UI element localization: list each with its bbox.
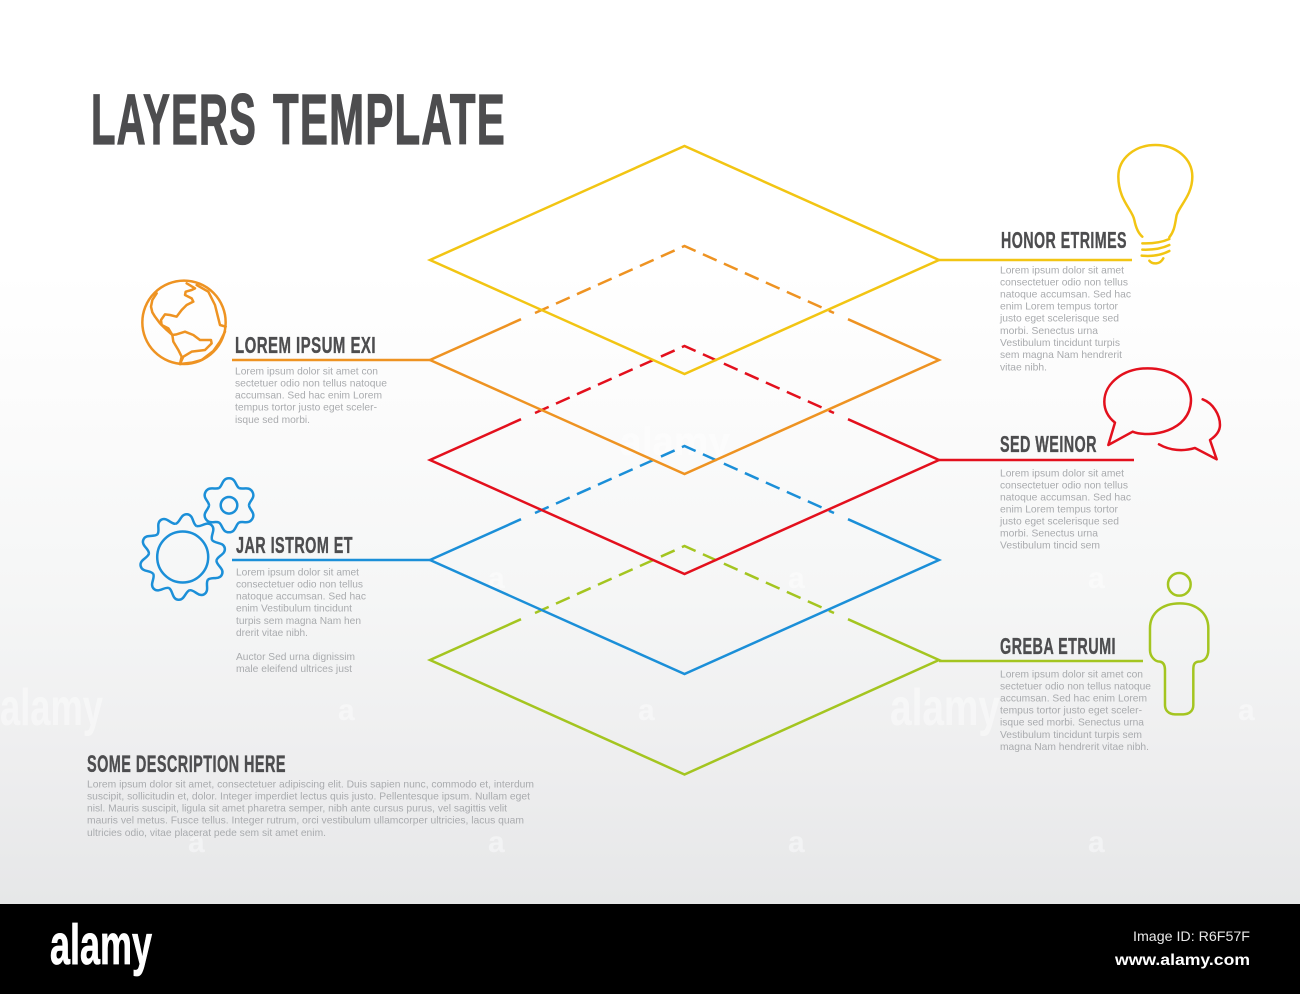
text: lorem ipsum exi body: tempus tortor justo eget sceler- bbox=[235, 402, 377, 414]
watermark: a bbox=[788, 562, 805, 595]
description block bbox=[87, 751, 534, 839]
text: jar istrom et body: male eleifend ultrices just bbox=[236, 663, 352, 675]
heading: some description here: SOME DESCRIPTION HERE bbox=[87, 751, 286, 778]
text: sed weinor body: enim Lorem tempus tortor bbox=[1000, 504, 1118, 516]
text: honor etrimes body: natoque accumsan. Sed hac bbox=[1000, 288, 1131, 300]
watermark: alamy bbox=[890, 679, 1000, 737]
watermark: a bbox=[1088, 826, 1105, 859]
watermark: a bbox=[338, 694, 355, 727]
footer image id: Image ID: R6F57F bbox=[1133, 928, 1250, 944]
icon: globe bbox=[142, 281, 226, 364]
icon: gears bbox=[134, 478, 257, 604]
text: honor etrimes body: vitae nibh. bbox=[1000, 362, 1047, 374]
icon: person bbox=[1150, 573, 1208, 714]
text: jar istrom et body: natoque accumsan. Sed hac bbox=[236, 590, 366, 602]
text: sed weinor body: Lorem ipsum dolor sit amet bbox=[1000, 468, 1124, 480]
text: description body bbox=[87, 778, 534, 839]
callout: sed weinor bbox=[939, 368, 1220, 552]
text: jar istrom et body: turpis sem magna Nam hen bbox=[236, 615, 361, 627]
callout: greba etrumi bbox=[939, 573, 1208, 753]
text: honor etrimes body: consectetuer odio non tellus bbox=[1000, 276, 1128, 288]
text: sed weinor body: morbi. Senectus urna bbox=[1000, 528, 1098, 540]
heading: honor etrimes: HONOR ETRIMES bbox=[1001, 227, 1127, 253]
text: jar istrom et body: consectetuer odio non tellus bbox=[236, 578, 363, 590]
watermark: a bbox=[638, 694, 655, 727]
text: lorem ipsum exi body: sectetuer odio non tellus natoque bbox=[235, 378, 387, 390]
text: sed weinor body: natoque accumsan. Sed hac bbox=[1000, 492, 1131, 504]
heading: sed weinor: SED WEINOR bbox=[1000, 431, 1097, 457]
text: honor etrimes body: Lorem ipsum dolor sit amet bbox=[1000, 264, 1124, 276]
watermark: alamy bbox=[0, 679, 103, 737]
text: description body: ultricies odio, vitae placerat pede sem sit amet enim. bbox=[87, 827, 326, 839]
text: greba etrumi body: sectetuer odio non tellus natoque bbox=[1000, 680, 1151, 692]
text: greba etrumi body: tempus tortor justo eget sceler- bbox=[1000, 704, 1142, 716]
connector: orange bbox=[232, 359, 431, 361]
text: lorem ipsum exi body: Lorem ipsum dolor sit amet con bbox=[235, 366, 378, 378]
watermark: a bbox=[488, 562, 505, 595]
watermark bbox=[0, 420, 1255, 859]
text: lorem ipsum exi body: accumsan. Sed hac enim Lorem bbox=[235, 390, 382, 402]
watermark: alamy bbox=[620, 420, 731, 464]
text: jar istrom et body: Auctor Sed urna dignissim bbox=[236, 651, 355, 663]
footer url: www.alamy.com bbox=[1114, 952, 1250, 969]
icon: speech bubbles bbox=[1104, 368, 1220, 459]
text: jar istrom et body: Lorem ipsum dolor sit amet bbox=[236, 566, 359, 578]
layer: red diamond bbox=[430, 346, 939, 574]
text: jar istrom et body: drerit vitae nibh. bbox=[236, 627, 308, 639]
layer: orange diamond bbox=[430, 246, 939, 474]
text: description body: nisl. Mauris suscipit, ligula sit amet pharetra semper, nibh ante cursus purus, vel sagittis velit bbox=[87, 802, 507, 814]
connector: red bbox=[939, 459, 1134, 461]
text: description body: mauris vel metus. Fusce tellus. Integer rutrum, orci vestibulum ullamcorper ultricies, lacus quam bbox=[87, 814, 524, 826]
text: greba etrumi body: magna Nam hendrerit vitae nibh. bbox=[1000, 741, 1149, 753]
callout: honor etrimes bbox=[939, 145, 1192, 374]
watermark: a bbox=[1088, 562, 1105, 595]
icon: light bulb bbox=[1118, 145, 1192, 263]
text: honor etrimes body bbox=[999, 264, 1131, 374]
text: lorem ipsum exi body bbox=[235, 366, 387, 426]
text: greba etrumi body: Vestibulum tincidunt turpis sem bbox=[1000, 729, 1142, 741]
text: sed weinor body: justo eget scelerisque sed bbox=[999, 516, 1119, 528]
text: description body: suscipit, sollicitudin et, dolor. Integer imperdiet lectus quis justo. Pellentesque ipsum. Nullam eget bbox=[87, 790, 530, 802]
text: honor etrimes body: Vestibulum tincidunt turpis bbox=[1000, 337, 1120, 349]
connector: blue bbox=[232, 559, 431, 561]
layer: green diamond bbox=[430, 546, 939, 774]
heading: greba etrumi: GREBA ETRUMI bbox=[1000, 633, 1116, 659]
title: TEMPLATE bbox=[273, 81, 506, 160]
text: honor etrimes body: enim Lorem tempus tortor bbox=[1000, 300, 1118, 312]
connector: green bbox=[939, 660, 1143, 662]
text: sed weinor body bbox=[999, 468, 1131, 552]
text: sed weinor body: consectetuer odio non tellus bbox=[1000, 480, 1128, 492]
text: honor etrimes body: morbi. Senectus urna bbox=[1000, 325, 1098, 337]
callout: jar istrom et bbox=[134, 478, 431, 675]
text: honor etrimes body: justo eget scelerisque sed bbox=[999, 312, 1119, 324]
text: description body: Lorem ipsum dolor sit amet, consectetuer adipiscing elit. Duis sapien nunc, commodo et, interdum bbox=[87, 778, 534, 790]
watermark: a bbox=[1238, 694, 1255, 727]
text: jar istrom et body: enim Vestibulum tincidunt bbox=[236, 602, 352, 614]
text: honor etrimes body: sem magna Nam hendrerit bbox=[1000, 349, 1122, 361]
footer logo: alamy bbox=[50, 913, 152, 977]
text: greba etrumi body bbox=[1000, 668, 1151, 753]
footer bar bbox=[0, 904, 1300, 994]
heading: lorem ipsum exi: LOREM IPSUM EXI bbox=[235, 332, 376, 358]
watermark: a bbox=[488, 826, 505, 859]
watermark: a bbox=[788, 826, 805, 859]
title: LAYERS bbox=[91, 81, 257, 160]
text: sed weinor body: Vestibulum tincid sem bbox=[1000, 540, 1100, 552]
heading: jar istrom et: JAR ISTROM ET bbox=[236, 532, 353, 558]
text: greba etrumi body: accumsan. Sed hac enim Lorem bbox=[1000, 692, 1147, 704]
callout: lorem ipsum exi bbox=[142, 281, 431, 426]
text: jar istrom et body bbox=[236, 566, 366, 675]
watermark: a bbox=[188, 826, 205, 859]
text: greba etrumi body: Lorem ipsum dolor sit amet con bbox=[1000, 668, 1143, 680]
text: lorem ipsum exi body: isque sed morbi. bbox=[235, 414, 310, 426]
layer: blue diamond bbox=[430, 446, 939, 674]
connector: yellow bbox=[939, 259, 1132, 261]
layer: yellow diamond bbox=[430, 146, 939, 374]
text: greba etrumi body: isque sed morbi. Senectus urna bbox=[1000, 716, 1144, 728]
